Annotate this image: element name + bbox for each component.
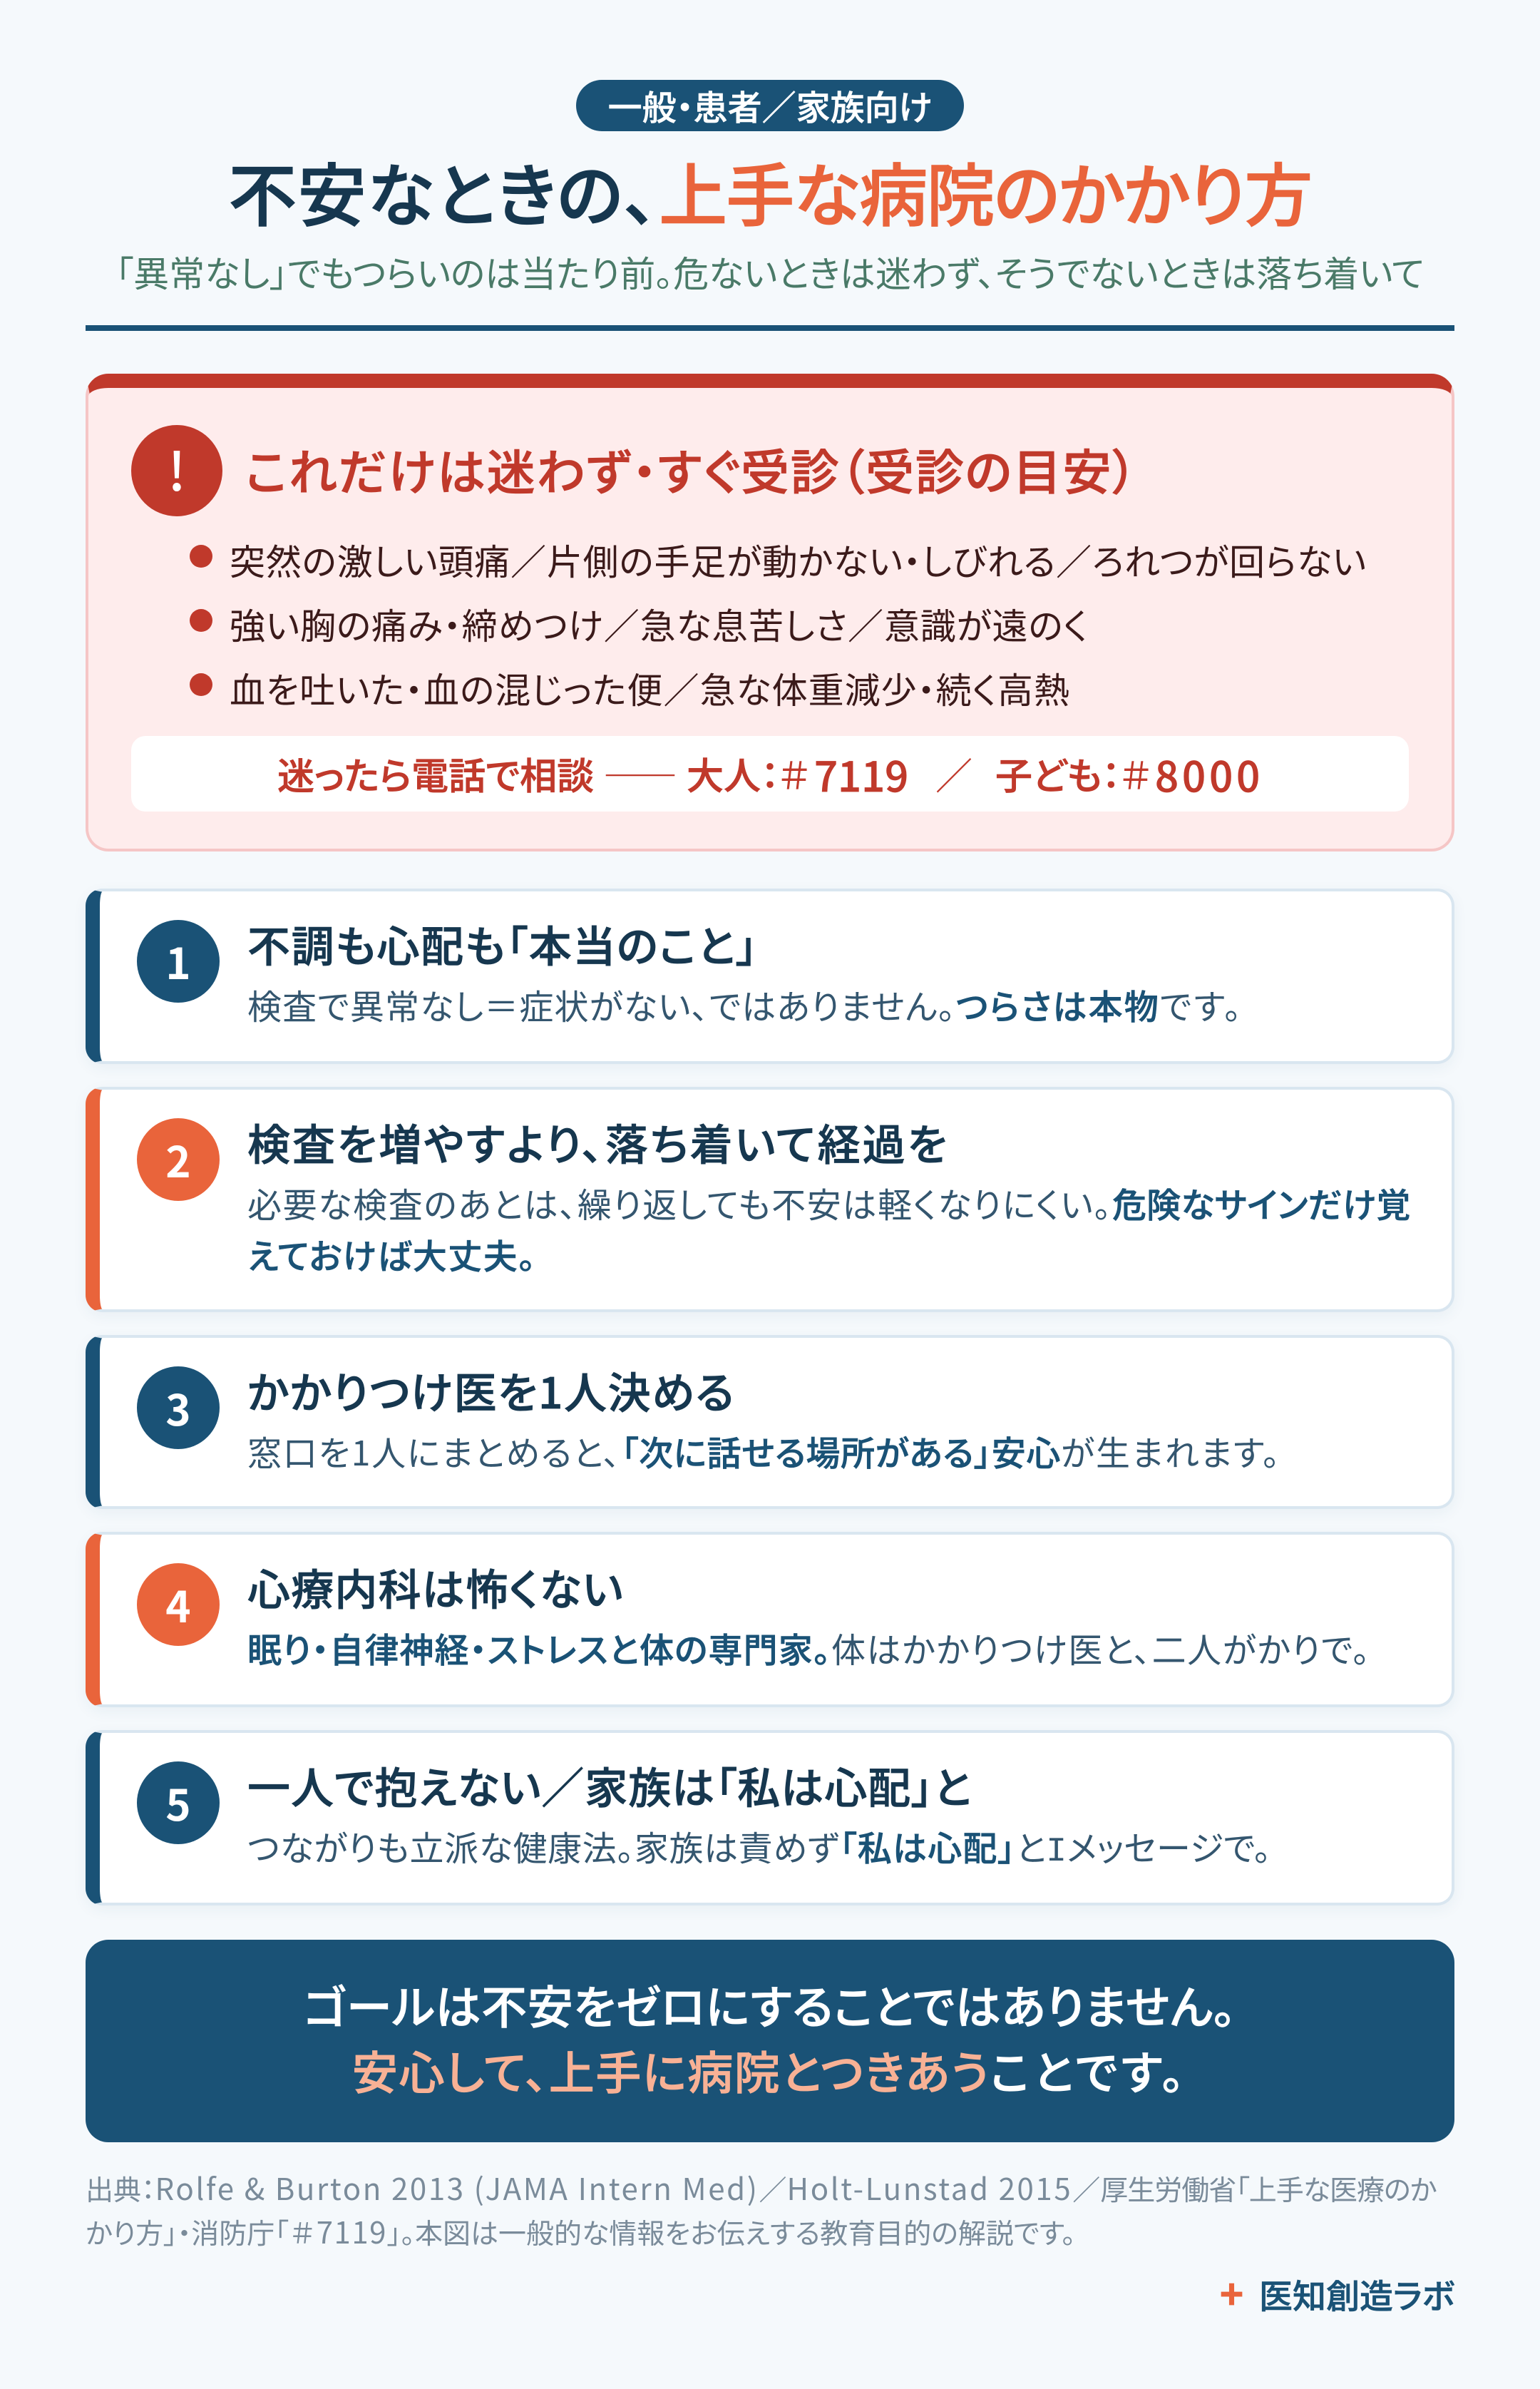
phone consultation box: 迷ったら電話で相談 <box>277 747 594 800</box>
number 5 <box>137 1761 220 1844</box>
step 4 heading: 心療内科は怖くない <box>247 1556 624 1618</box>
step 3 heading: かかりつけ医を1人決める <box>247 1359 735 1421</box>
step 2 text <box>247 1177 1411 1279</box>
number 2: 2 <box>165 1128 191 1190</box>
goal banner: 安心して、上手に病院とつきあうことです。 <box>352 2037 1188 2103</box>
phone consultation box: 7119 <box>814 744 908 804</box>
warning text 2: 強い胸の痛み・締めつけ／急な息苦しさ／意識が遠のく <box>230 598 1089 650</box>
warning bullet 2 <box>190 609 212 632</box>
title: 不安なときの、上手な病院のかかり方 <box>228 141 1312 240</box>
card: step 4 <box>86 1532 1454 1707</box>
phone consultation box: ―― <box>603 747 677 800</box>
phone consultation box: 大人： <box>687 747 779 800</box>
icon: exclamation <box>131 425 222 516</box>
audience pill: 一般・患者／家族向け <box>608 80 932 130</box>
sources <box>86 2166 1437 2253</box>
step 4 text: 眠り・自律神経・ストレスと体の専門家。体はかかりつけ医と、二人がかりで。 <box>247 1622 1371 1672</box>
warning heading: これだけは迷わず・すぐ受診（受診の目安） <box>245 434 1138 504</box>
card: step 2 <box>86 1087 1454 1312</box>
card: step 5 <box>86 1730 1454 1905</box>
phone consultation box: 子ども： <box>995 747 1120 800</box>
number 3 <box>137 1366 220 1449</box>
brand logo: + <box>1220 2263 1243 2321</box>
number 2 <box>137 1118 220 1201</box>
warning bullet 3 <box>190 673 212 696</box>
warning text 1: 突然の激しい頭痛／片側の手足が動かない・しびれる／ろれつが回らない <box>230 534 1367 585</box>
phone consultation box: 8000 <box>1155 744 1263 804</box>
phone consultation box: ＃ <box>776 747 813 800</box>
step 5 text: つながりも立派な健康法。家族は責めず「私は心配」とIメッセージで。 <box>247 1821 1271 1871</box>
card: step 3 <box>86 1335 1454 1509</box>
step 2 heading: 検査を増やすより、落ち着いて経過を <box>247 1111 949 1173</box>
icon: exclamation: ! <box>168 430 186 506</box>
warning text 3: 血を吐いた・血の混じった便／急な体重減少・続く高熱 <box>230 663 1070 714</box>
number 5: 5 <box>165 1771 191 1833</box>
sources: 出典：Rolfe & Burton 2013 (JAMA Intern Med)／Holt-Lunstad 2015／厚生労働省「上手な医療のか <box>86 2166 1436 2209</box>
step 2 text: えておけば大丈夫。 <box>247 1229 537 1279</box>
number 1 <box>137 920 220 1003</box>
step 1 heading: 不調も心配も「本当のこと」 <box>247 913 759 975</box>
brand logo: 医知創造ラボ <box>1259 2269 1454 2318</box>
goal banner: ゴールは不安をゼロにすることではありません。 <box>304 1972 1236 2037</box>
number 3: 3 <box>165 1376 191 1438</box>
phone consultation box <box>131 736 1409 812</box>
subtitle: 「異常なし」でもつらいのは当たり前。危ないときは迷わず、そうでないときは落ち着いて <box>115 246 1424 297</box>
phone consultation box: ／ <box>935 747 972 800</box>
header rule <box>86 325 1454 331</box>
card: step 1 <box>86 889 1454 1064</box>
step 2 text: 必要な検査のあとは、繰り返しても不安は軽くなりにくい。危険なサインだけ覚 <box>247 1177 1411 1227</box>
phone consultation box: ＃ <box>1117 747 1154 800</box>
panel: urgent warning <box>86 374 1454 851</box>
number 4 <box>137 1563 220 1646</box>
number 1: 1 <box>165 930 191 992</box>
step 5 heading: 一人で抱えない／家族は「私は心配」と <box>247 1754 972 1816</box>
warning bullet 1 <box>190 545 212 568</box>
step 1 text: 検査で異常なし＝症状がない、ではありません。つらさは本物です。 <box>247 979 1243 1029</box>
step 3 text: 窓口を1人にまとめると、「次に話せる場所がある」安心が生まれます。 <box>247 1426 1281 1475</box>
sources: かり方」・消防庁「＃7119」。本図は一般的な情報をお伝えする教育目的の解説です。 <box>86 2209 1076 2253</box>
goal banner <box>86 1940 1454 2142</box>
number 4: 4 <box>165 1573 191 1635</box>
